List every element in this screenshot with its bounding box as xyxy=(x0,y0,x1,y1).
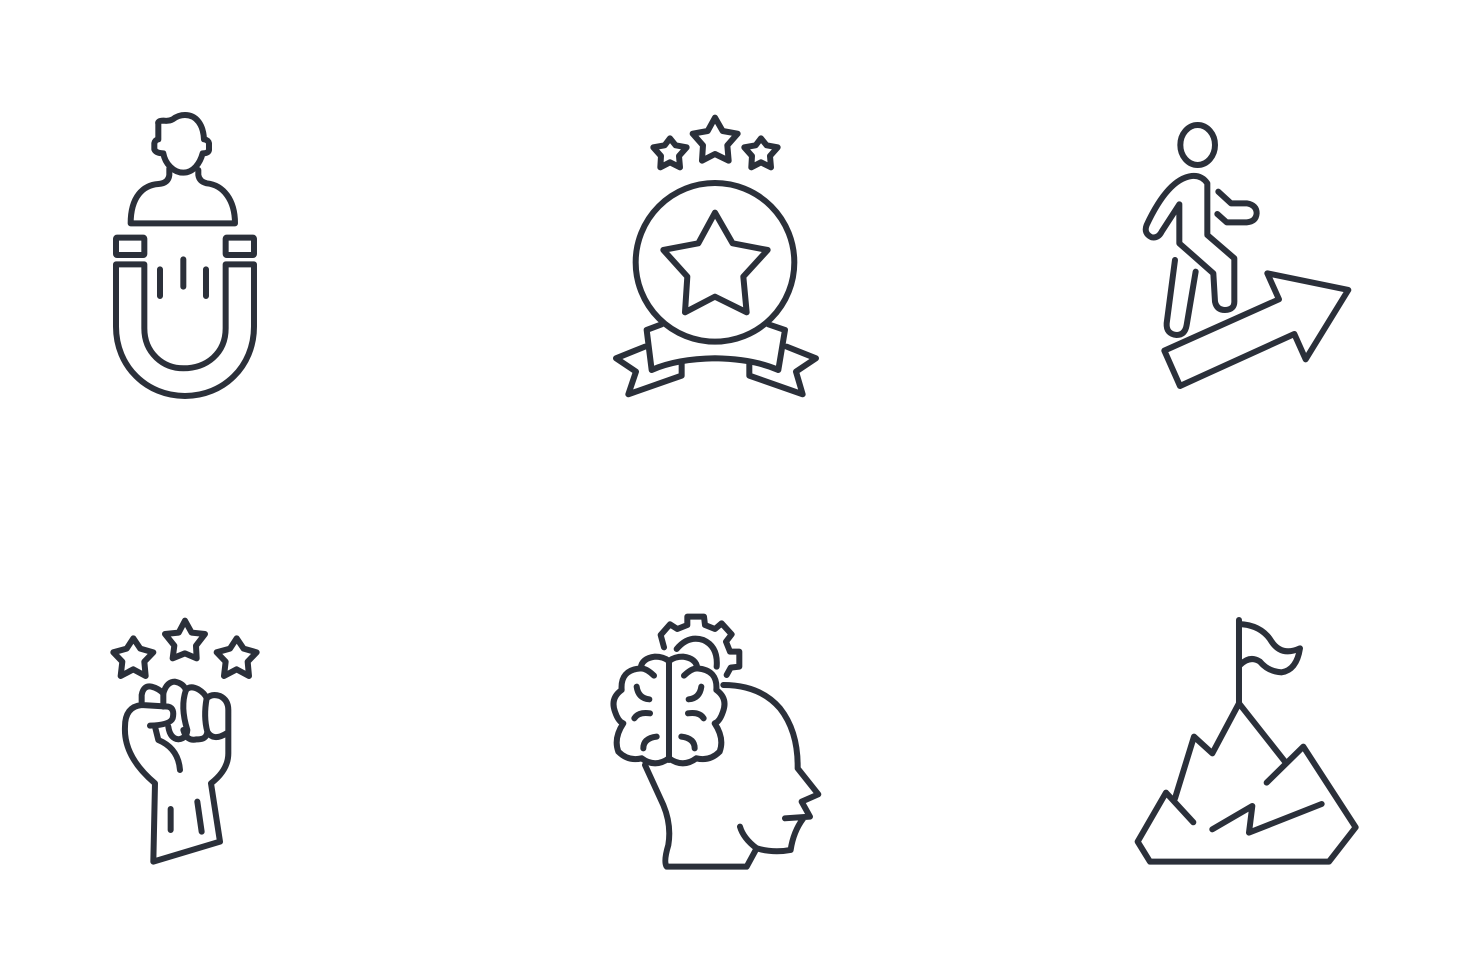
icon: person walking up arrow xyxy=(1146,125,1348,386)
icon: mountain with flag xyxy=(1138,620,1356,862)
icon: star medal with ribbon xyxy=(616,118,816,394)
icon: person above magnet xyxy=(116,115,254,396)
icon: raised fist with stars xyxy=(113,621,257,862)
icon: head with brain and gear xyxy=(613,617,818,867)
